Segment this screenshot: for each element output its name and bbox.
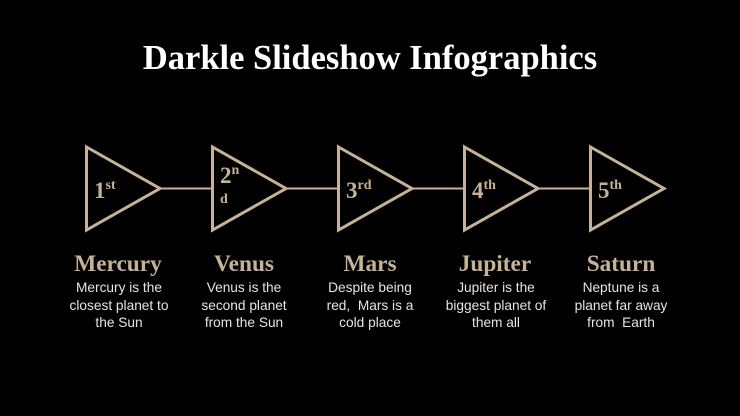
ordinal labels: 2 <box>220 163 232 188</box>
ordinal labels: 3 <box>346 178 358 203</box>
ordinal labels: n <box>232 163 240 178</box>
text: Mars: Despite being red, Mars is a cold place <box>327 280 413 330</box>
ordinal labels: th <box>610 178 622 193</box>
heading: Jupiter: Jupiter <box>459 251 531 277</box>
title: Darkle Slideshow Infographics <box>143 39 597 77</box>
triangle markers <box>86 147 664 230</box>
ordinal labels <box>94 163 622 207</box>
ordinal labels: rd <box>358 178 372 193</box>
heading: Mars: Mars <box>343 251 397 277</box>
connector lines <box>160 188 590 190</box>
heading: Saturn: Saturn <box>587 251 655 277</box>
ordinal labels: 1 <box>94 178 106 203</box>
text: Saturn: Neptune is a planet far away from Earth <box>575 280 667 330</box>
ordinal labels: st <box>106 178 116 193</box>
text: Venus: Venus is the second planet from the Sun <box>201 280 287 330</box>
ordinal labels: 5 <box>598 178 610 203</box>
heading: Mercury: Mercury <box>74 251 162 277</box>
text: Mercury: Mercury is the closest planet to the Sun <box>70 280 168 330</box>
text: Jupiter: Jupiter is the biggest planet of them all <box>446 280 546 330</box>
ordinal labels: th <box>484 178 496 193</box>
ordinal labels: d <box>220 192 228 207</box>
heading: Venus: Venus <box>214 251 274 277</box>
ordinal labels: 4 <box>472 178 484 203</box>
